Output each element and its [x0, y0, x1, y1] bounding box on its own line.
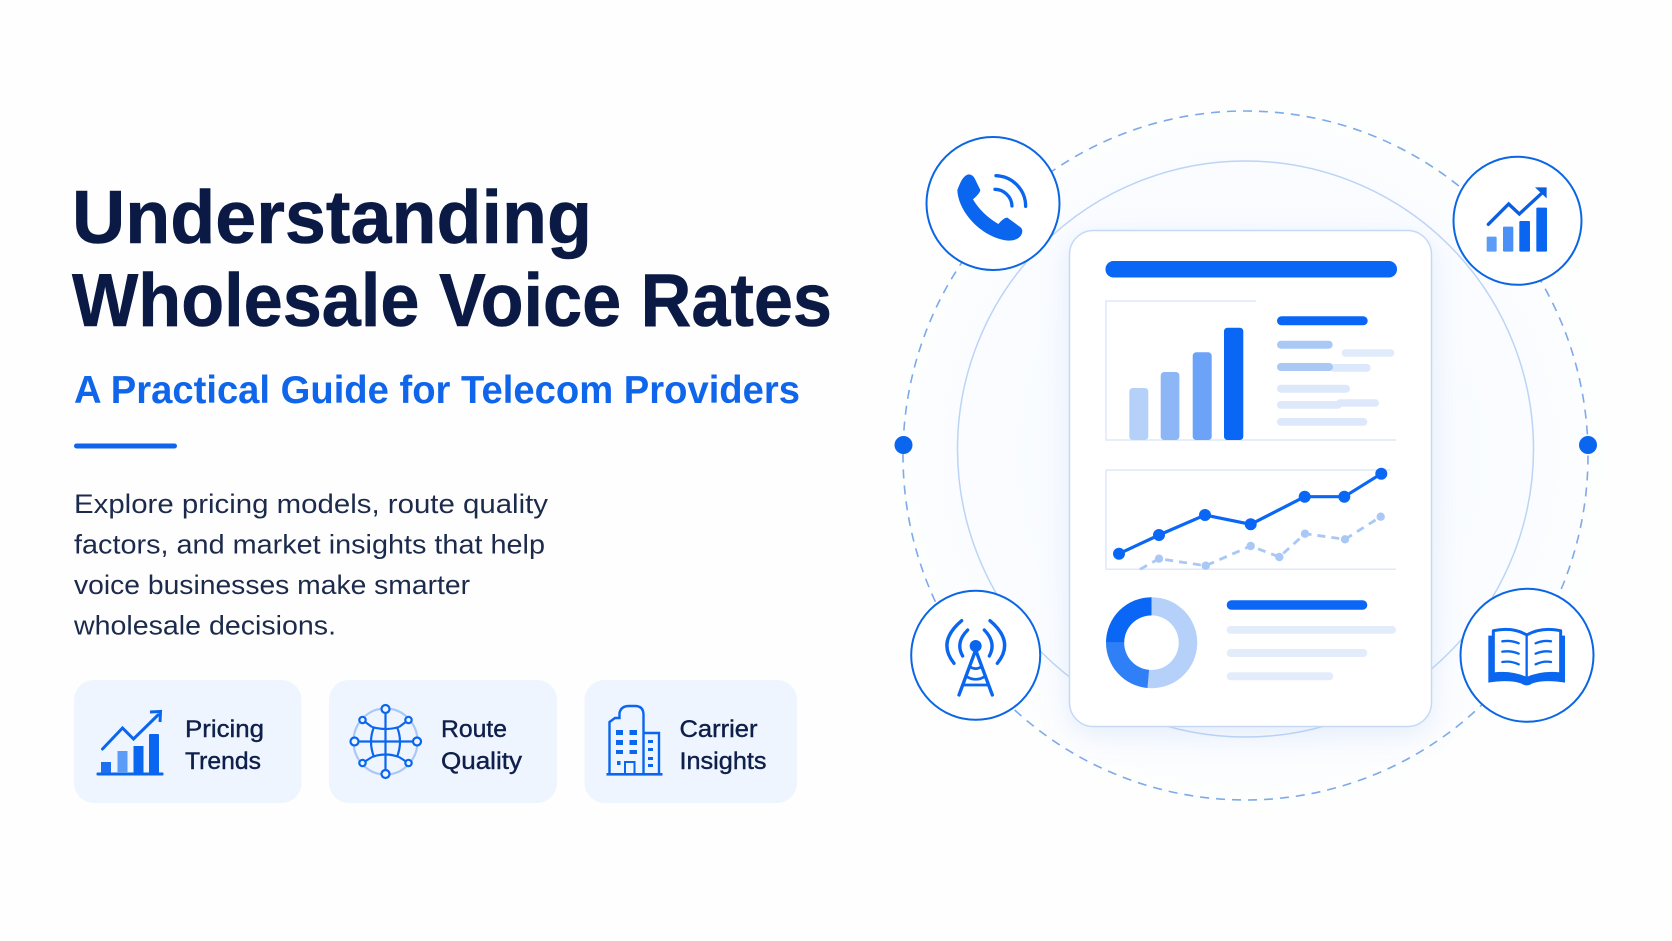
icon badge: growth chart [1454, 157, 1582, 285]
icon badge: signal tower [911, 591, 1040, 720]
label: pricing trends: Pricing [185, 716, 264, 743]
panel: report dashboard [1070, 230, 1432, 726]
card: route quality [329, 680, 557, 803]
accent rule [74, 444, 177, 448]
title [72, 175, 832, 342]
label: route quality: Quality [441, 748, 522, 775]
donut chart [1106, 597, 1197, 688]
description text: factors, and market insights that help [74, 530, 545, 560]
donut legend lines [1227, 600, 1396, 680]
icon badge: open book [1460, 589, 1594, 722]
label: route quality [441, 716, 522, 775]
label: carrier insights: Carrier [680, 716, 758, 743]
orbit dot left [894, 436, 912, 454]
title: Understanding [72, 175, 592, 259]
title: Wholesale Voice Rates [72, 258, 832, 342]
orbit dot right [1579, 436, 1597, 454]
label: pricing trends: Trends [185, 748, 261, 775]
card: pricing trends [74, 680, 302, 803]
legend lines [1277, 316, 1394, 426]
label: route quality: Route [441, 716, 507, 743]
icon: office building [606, 706, 662, 776]
inner orbit circle [958, 161, 1534, 737]
description text [73, 489, 549, 640]
outer dashed orbit [903, 111, 1588, 800]
bar chart [1106, 301, 1396, 440]
line chart [1106, 468, 1396, 570]
header bar [1106, 261, 1397, 278]
description text: Explore pricing models, route quality [74, 489, 549, 519]
label: pricing trends [185, 716, 264, 775]
label: carrier insights [680, 716, 766, 775]
icon: pricing chart [96, 712, 164, 776]
description text: wholesale decisions. [73, 610, 336, 640]
card: carrier insights [584, 680, 797, 803]
icon: globe network [350, 705, 421, 778]
label: carrier insights: Insights [680, 748, 766, 775]
icon badge: phone [926, 137, 1060, 270]
description text: voice businesses make smarter [74, 570, 470, 600]
subtitle: A Practical Guide for Telecom Providers [74, 369, 800, 412]
